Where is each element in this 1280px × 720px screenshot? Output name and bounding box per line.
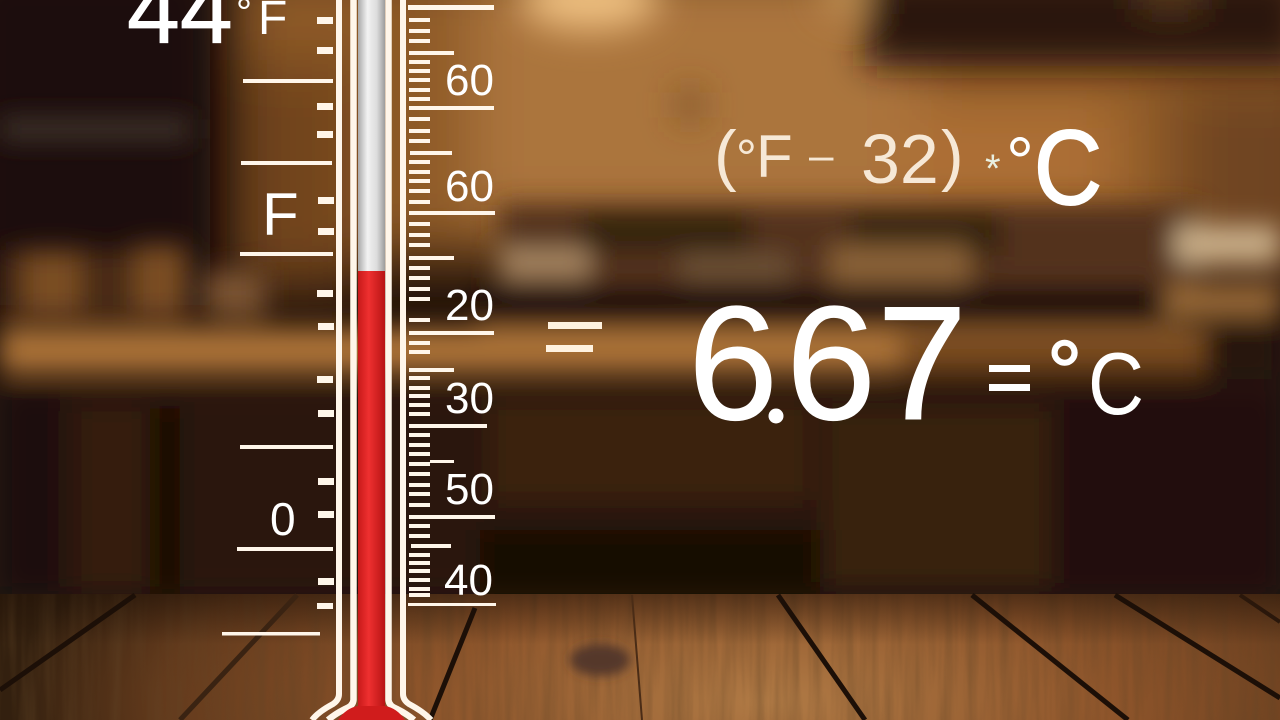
label: 60 upper: 60 — [445, 56, 494, 105]
right scale ticks — [408, 5, 496, 606]
formula: 32 — [861, 120, 939, 198]
formula: C — [1034, 109, 1102, 227]
label: 30: 30 — [445, 374, 494, 423]
formula: – — [809, 131, 834, 180]
result: 6.67 = °C — [688, 273, 1144, 454]
equals sign — [546, 322, 602, 352]
result: 6.67 = °C: ° — [1047, 322, 1082, 421]
formula — [714, 109, 1102, 227]
label: 60 lower: 60 — [445, 162, 494, 211]
wooden table — [0, 594, 1280, 720]
left scale ticks — [222, 17, 334, 636]
result: 6.67 = °C: 6 — [786, 273, 876, 454]
label: 0: 0 — [270, 493, 296, 545]
label: 20: 20 — [445, 281, 494, 330]
formula: ) — [941, 117, 964, 193]
formula: F — [756, 123, 793, 190]
result: 6.67 = °C: 7 — [877, 273, 967, 454]
label: F: F — [262, 181, 299, 248]
thermometer — [222, 0, 496, 720]
result: 6.67 = °C: C — [1088, 334, 1144, 433]
formula: ° — [736, 130, 757, 188]
formula: * — [985, 147, 1001, 191]
result: 6.67 = °C: 6 — [688, 273, 778, 454]
glass tube and outer rails — [312, 0, 431, 720]
formula: ( — [714, 117, 737, 193]
label: 40: 40 — [444, 556, 493, 605]
mercury column — [338, 0, 405, 720]
formula: ° — [1006, 123, 1034, 201]
scale labels — [127, 0, 494, 605]
label: 50: 50 — [445, 465, 494, 514]
